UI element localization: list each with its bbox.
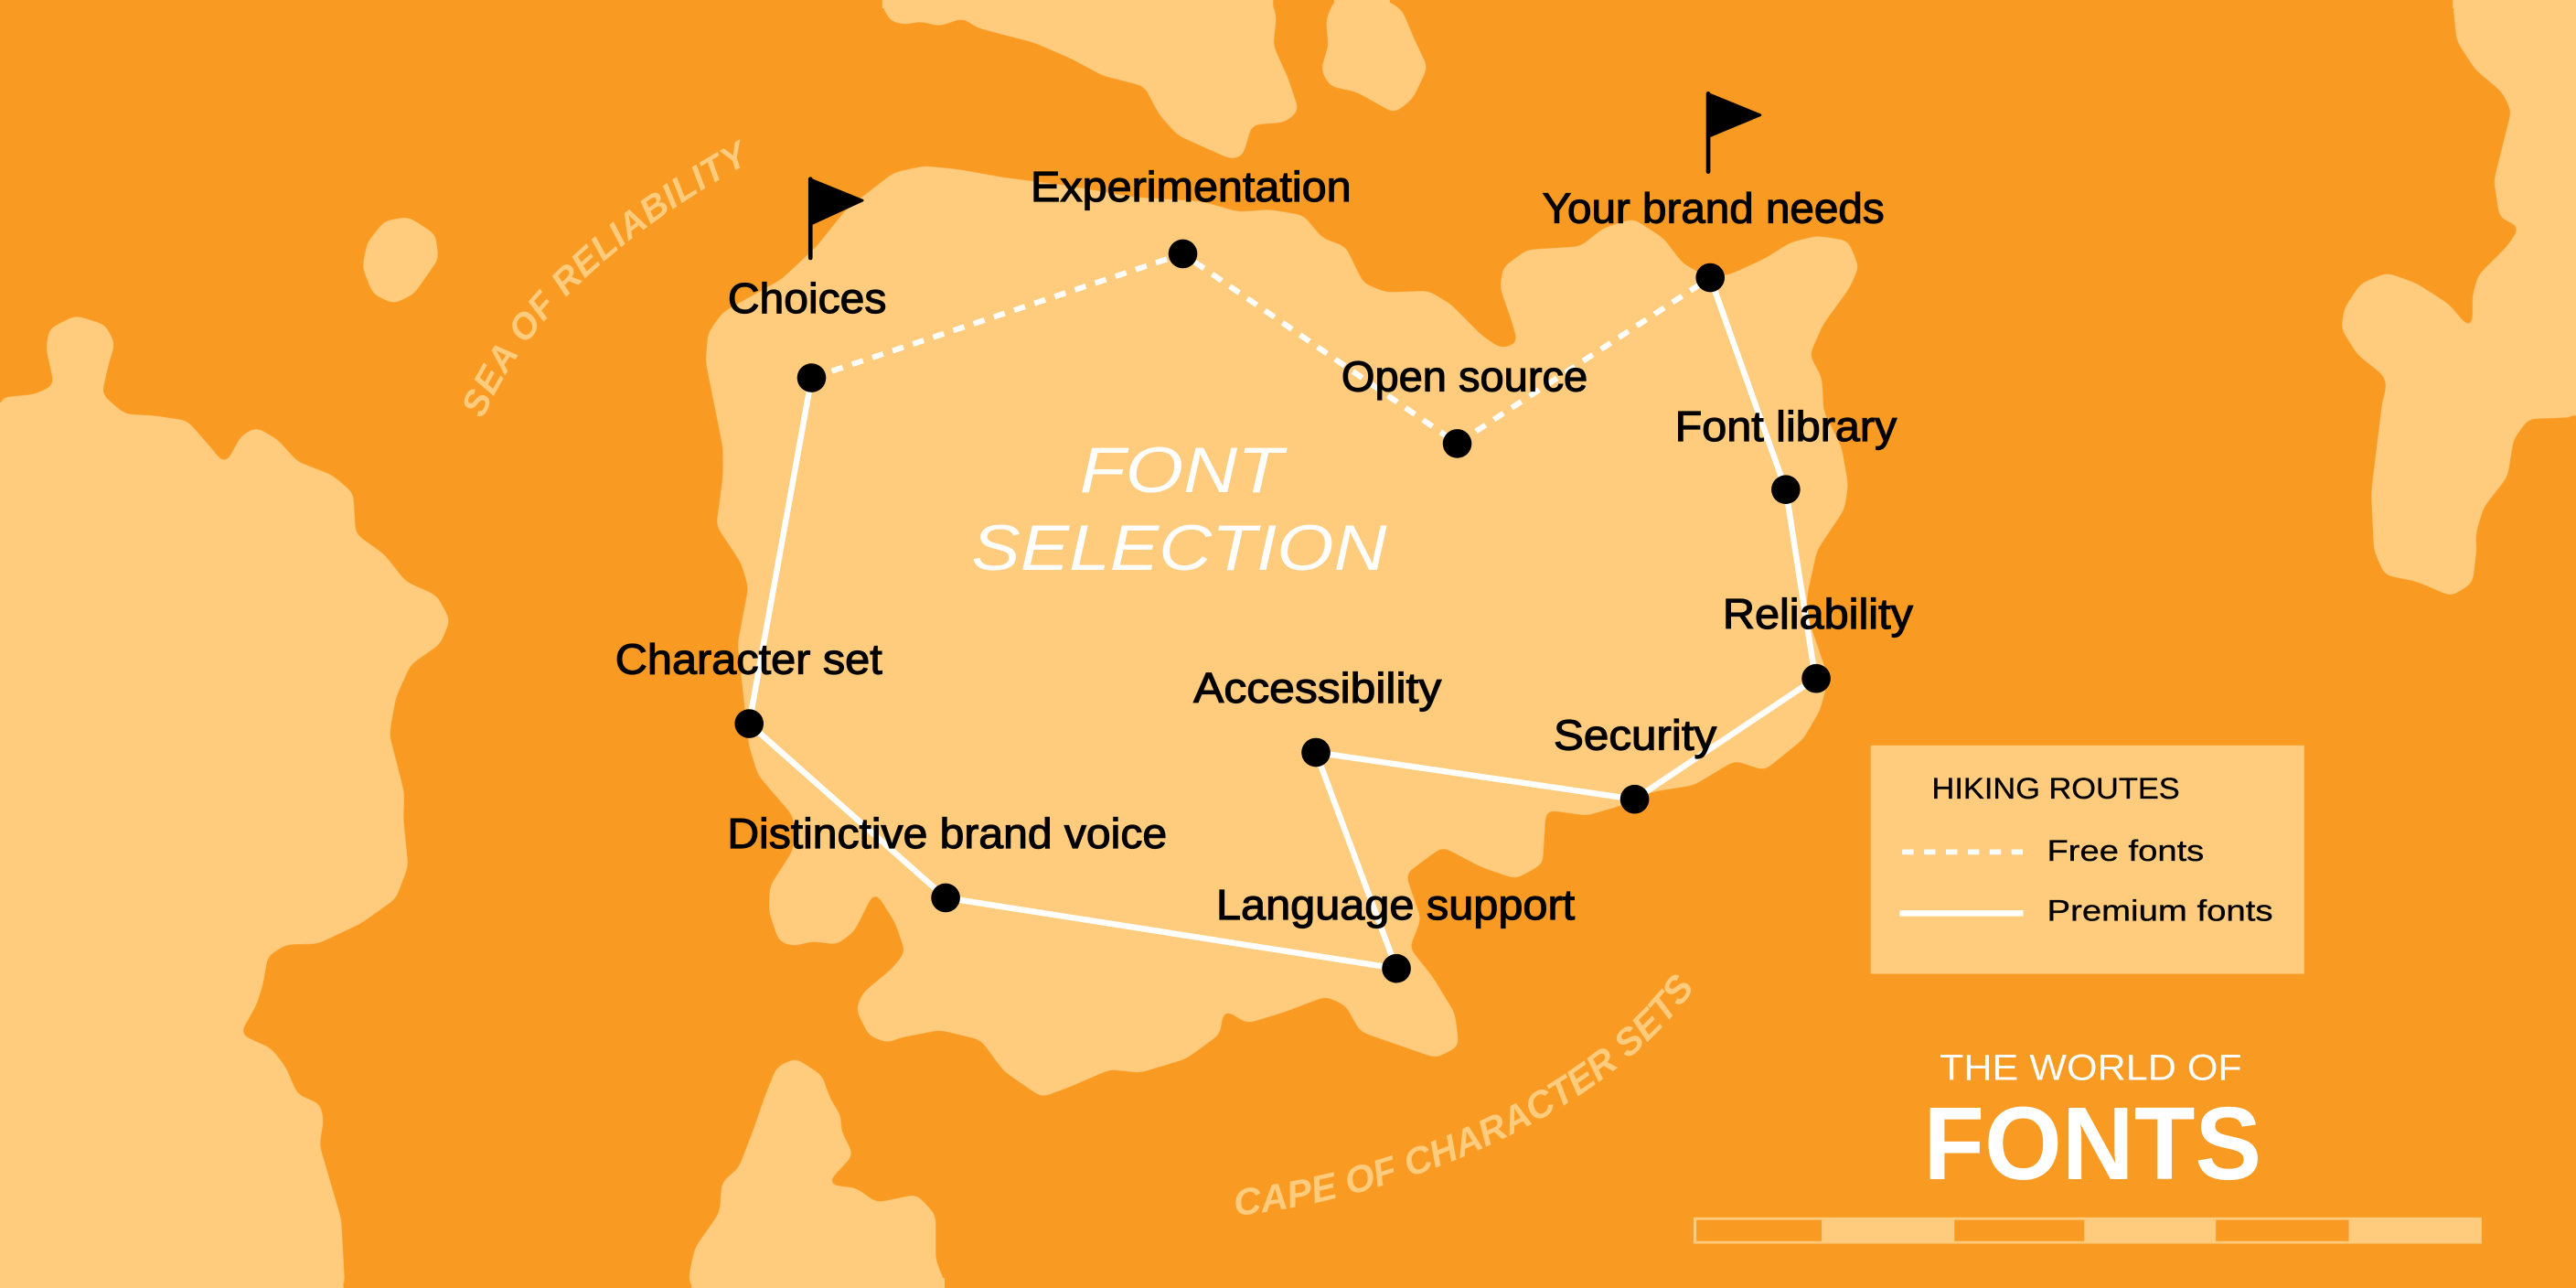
scale bar	[1694, 1218, 2482, 1244]
route: free fonts dashed line	[811, 253, 1710, 444]
heading: Font Selection: FONT	[1080, 435, 1288, 506]
label: Choices: Choices	[728, 274, 886, 322]
label: Font library: Font library	[1675, 402, 1897, 450]
label: Distinctive brand voice: Distinctive brand voice	[727, 810, 1167, 857]
waypoint dots	[734, 240, 1831, 982]
heading: Font Selection: SELECTION	[971, 512, 1387, 584]
land: large western coast	[0, 316, 450, 1288]
land: small round island	[362, 217, 439, 304]
label: Character set: Character set	[615, 635, 882, 682]
land: northern islet	[1320, 0, 1427, 113]
route: premium fonts solid line	[749, 278, 1815, 969]
heading: Font Selection	[971, 435, 1387, 584]
panel: legend hiking routes	[1871, 746, 2304, 974]
legend: free fonts text: Free fonts	[2047, 834, 2204, 867]
legend: premium fonts text: Premium fonts	[2047, 895, 2273, 928]
sea label: Cape of Character Sets: CAPE OF CHARACTER SETS	[1235, 975, 1691, 1215]
title: Fonts: FONTS	[1923, 1086, 2261, 1201]
land: southern peninsula	[689, 1058, 947, 1288]
land: central island	[706, 166, 1859, 1098]
land: eastern coast	[2341, 0, 2576, 596]
label: Language support: Language support	[1216, 881, 1575, 928]
sea label: Sea of Reliability: SEA OF RELIABILITY	[465, 139, 741, 416]
label: Reliability: Reliability	[1723, 590, 1914, 638]
label: Security: Security	[1554, 711, 1717, 758]
legend: premium fonts solid sample	[1900, 912, 2023, 915]
legend: free fonts dashed sample	[1902, 851, 2023, 853]
label: Experimentation: Experimentation	[1031, 163, 1352, 210]
label: Your brand needs: Your brand needs	[1543, 184, 1885, 231]
label: Accessibility: Accessibility	[1193, 664, 1442, 712]
label: Open source: Open source	[1341, 352, 1587, 400]
land: northern peninsula	[879, 0, 1299, 159]
legend title: HIKING ROUTES	[1932, 772, 2180, 805]
icon: flag at Your brand needs	[1708, 93, 1760, 172]
icon: flag at Choices	[810, 179, 862, 258]
title: The World of: THE WORLD OF	[1940, 1047, 2242, 1088]
